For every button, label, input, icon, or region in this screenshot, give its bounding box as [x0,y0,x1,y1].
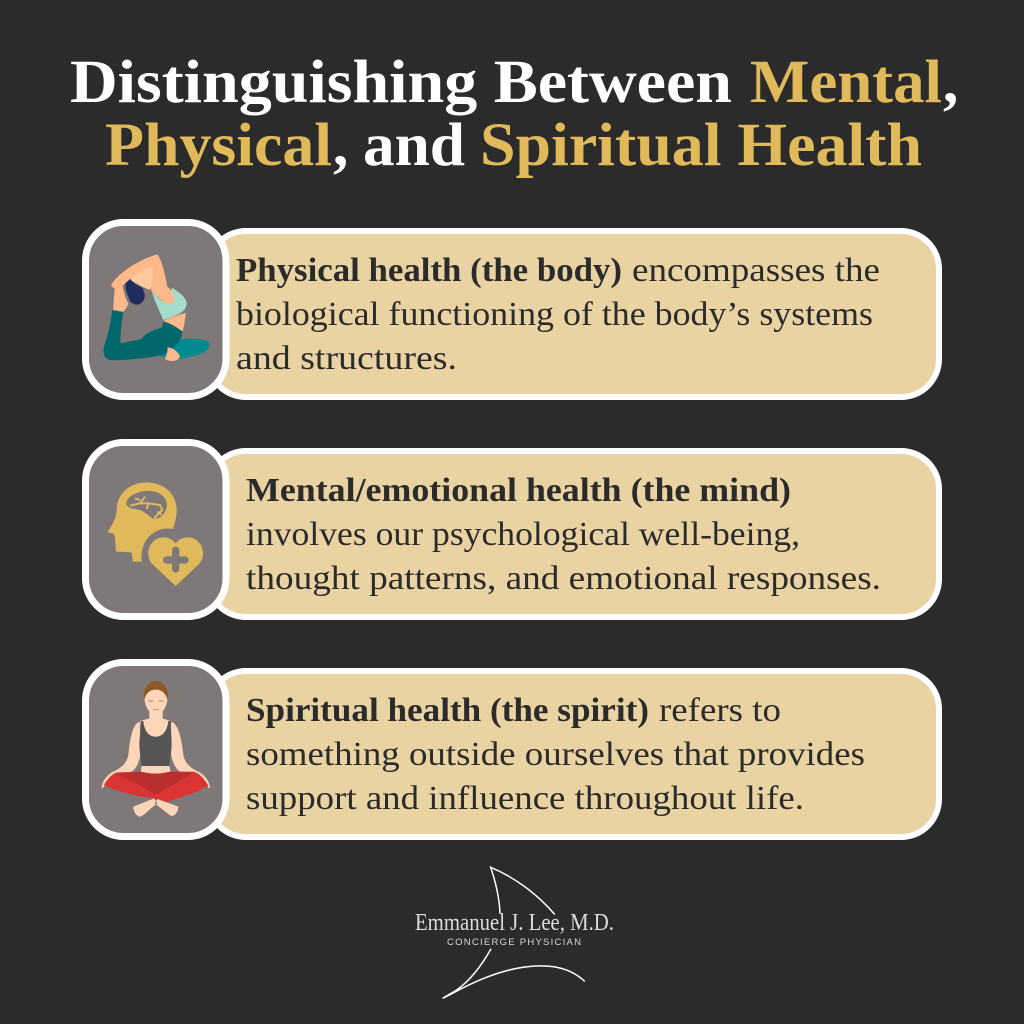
logo name: Emmanuel J. Lee, M.D. [415,910,614,936]
mental health text [246,472,881,597]
title: Physical [105,112,332,179]
spiritual health text: support and influence throughout life. [246,780,804,817]
logo tagline: CONCIERGE PHYSICIAN [447,937,581,948]
icon: meditating woman [102,681,210,817]
spiritual health text: Spiritual health (the spirit) [246,692,649,729]
icon: head with brain and heart [108,482,203,586]
logo curves [443,867,584,998]
title: Distinguishing Between [70,49,732,116]
title: and [363,112,465,179]
title: Spiritual Health [480,112,922,179]
panel: spiritual health [86,662,939,837]
title: Mental [750,49,942,116]
physical health text: biological functioning of the body’s systems [236,296,873,333]
panel: physical health [86,222,939,397]
mental health card [208,451,939,617]
title [70,49,958,179]
physical health text [236,252,880,377]
title: , [333,112,348,179]
physical health text: Physical health (the body) [236,252,622,289]
spiritual health text: something outside ourselves that provides [246,736,865,773]
mental health text: Mental/emotional health (the mind) [246,472,791,509]
physical health text: encompasses the [632,252,880,289]
logo [415,867,614,998]
spiritual icon tile [86,662,226,836]
panel: mental health [86,442,939,617]
title: , [943,49,958,116]
spiritual health text [246,692,865,817]
physical icon tile [86,222,226,396]
physical health text: and structures. [236,340,457,377]
physical health card [208,231,939,397]
mental health text: involves our psychological well-being, [246,516,800,553]
mental icon tile [86,442,226,616]
spiritual health card [208,671,939,837]
icon: yoga pose [103,254,209,361]
mental health text: thought patterns, and emotional responses. [246,560,881,597]
spiritual health text: refers to [659,692,781,729]
